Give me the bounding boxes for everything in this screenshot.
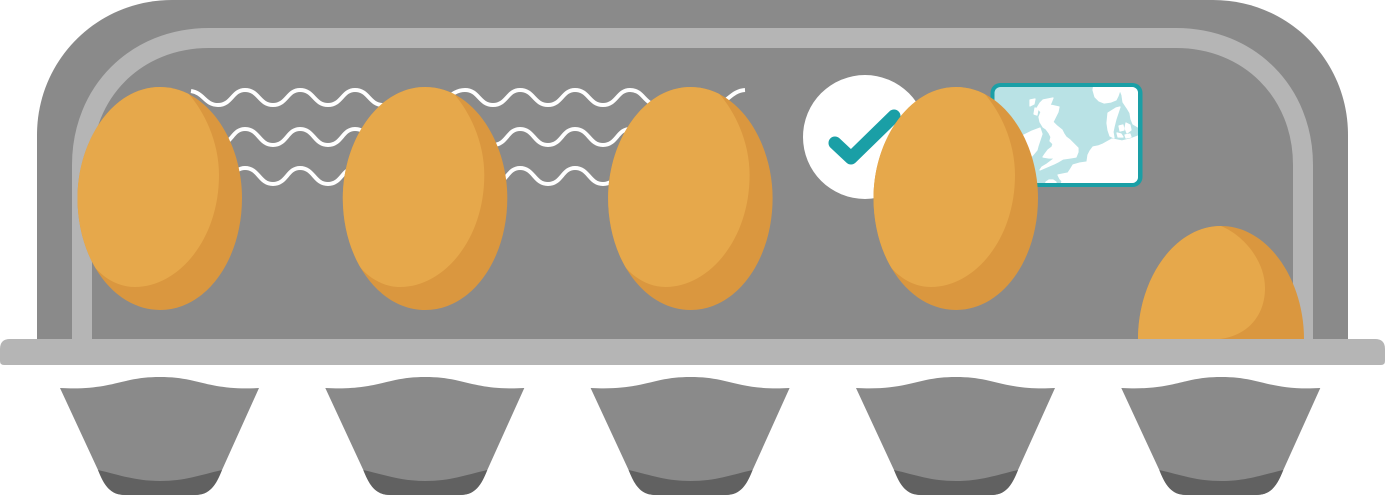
lid inner band [82, 38, 1303, 339]
cup 5 [1121, 377, 1320, 495]
egg 4 [874, 87, 1038, 310]
map card [990, 83, 1145, 190]
cup 2 [325, 377, 524, 495]
carton rim [0, 339, 1385, 365]
egg 1 [78, 87, 242, 310]
cup 3 [591, 377, 790, 495]
cup 4 [856, 377, 1055, 495]
egg 5 (partly hidden) [1138, 226, 1304, 339]
egg 2 [342, 87, 508, 310]
egg 3 [608, 87, 773, 310]
carton lid [37, 0, 1348, 339]
wavy lines [191, 90, 745, 184]
cup 1 [60, 377, 259, 495]
check badge [803, 75, 927, 199]
